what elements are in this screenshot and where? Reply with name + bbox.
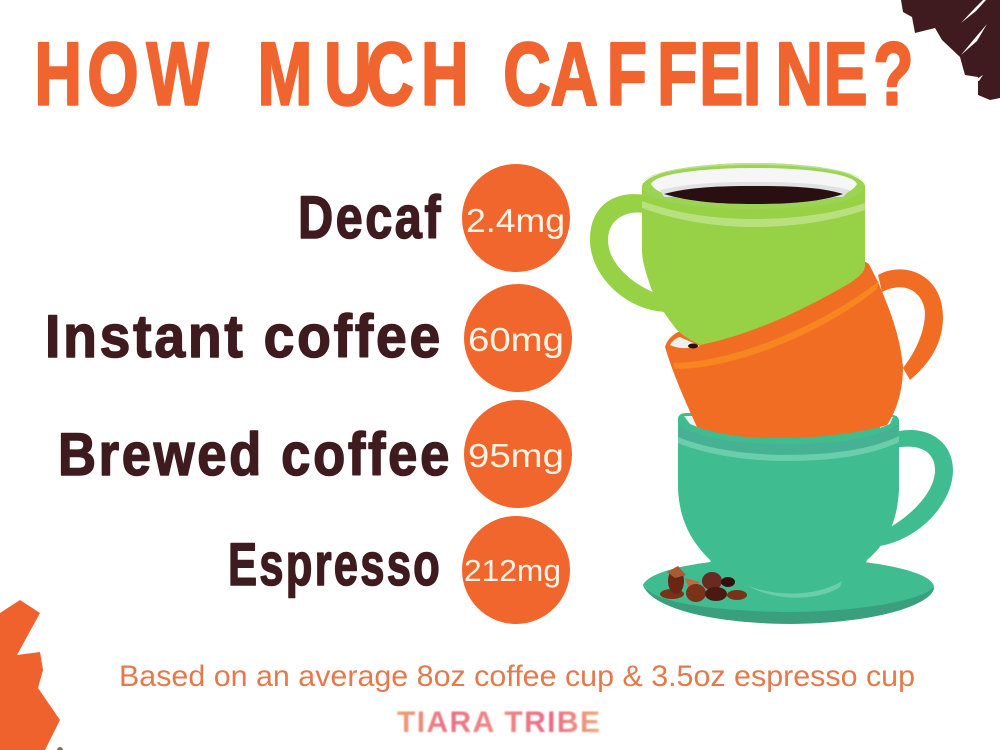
value: 95mg: 95mg xyxy=(468,437,564,474)
green band xyxy=(642,201,865,227)
row: Instant coffee xyxy=(45,284,572,392)
teal front rim xyxy=(678,424,899,454)
orange handle xyxy=(878,269,943,380)
label: Espresso: Espresso xyxy=(228,531,442,598)
row: Decaf xyxy=(298,164,570,272)
badge: 60mg xyxy=(464,284,572,392)
orange body xyxy=(665,262,903,438)
teal band xyxy=(678,436,899,461)
badge: 212mg xyxy=(462,516,570,624)
value: 60mg: 60mg xyxy=(468,321,564,358)
value: 2.4mg: 2.4mg xyxy=(466,202,565,239)
footnote: Based on an average 8oz coffee cup & 3.5oz espresso cup xyxy=(119,660,915,693)
green handle xyxy=(590,194,665,312)
brush: top right xyxy=(901,0,1000,100)
label: Brewed coffee: Brewed coffee xyxy=(58,421,452,488)
badge: 2.4mg xyxy=(462,164,570,272)
title: HOW MUCH CAFFEINE? xyxy=(34,24,913,124)
orange coffee hint xyxy=(688,344,698,348)
saucer highlight xyxy=(747,581,842,598)
brand: Tiara Tribe: TIARA TRIBE xyxy=(397,706,600,739)
cup: orange xyxy=(665,262,943,438)
row: Espresso xyxy=(228,516,570,624)
brush: bottom left xyxy=(0,600,63,750)
label: Instant coffee: Instant coffee xyxy=(45,303,443,370)
illustration: stacked coffee cups xyxy=(590,163,953,624)
teal rim interior xyxy=(684,416,893,428)
coffee surface xyxy=(664,186,843,204)
green body xyxy=(642,185,865,345)
saucer xyxy=(643,560,934,624)
badge: 95mg xyxy=(464,400,572,508)
teal body xyxy=(678,413,899,598)
orange cup interior xyxy=(670,337,700,348)
green cup interior xyxy=(651,168,857,204)
green rim xyxy=(642,163,865,209)
row: Brewed coffee xyxy=(58,400,572,508)
teal handle xyxy=(870,430,953,547)
cup: green xyxy=(590,163,865,345)
label: Decaf: Decaf xyxy=(298,184,443,251)
orange band xyxy=(673,281,879,369)
coffee beans xyxy=(660,566,747,602)
value: 212mg: 212mg xyxy=(464,553,561,588)
cup: teal with saucer xyxy=(643,413,953,624)
